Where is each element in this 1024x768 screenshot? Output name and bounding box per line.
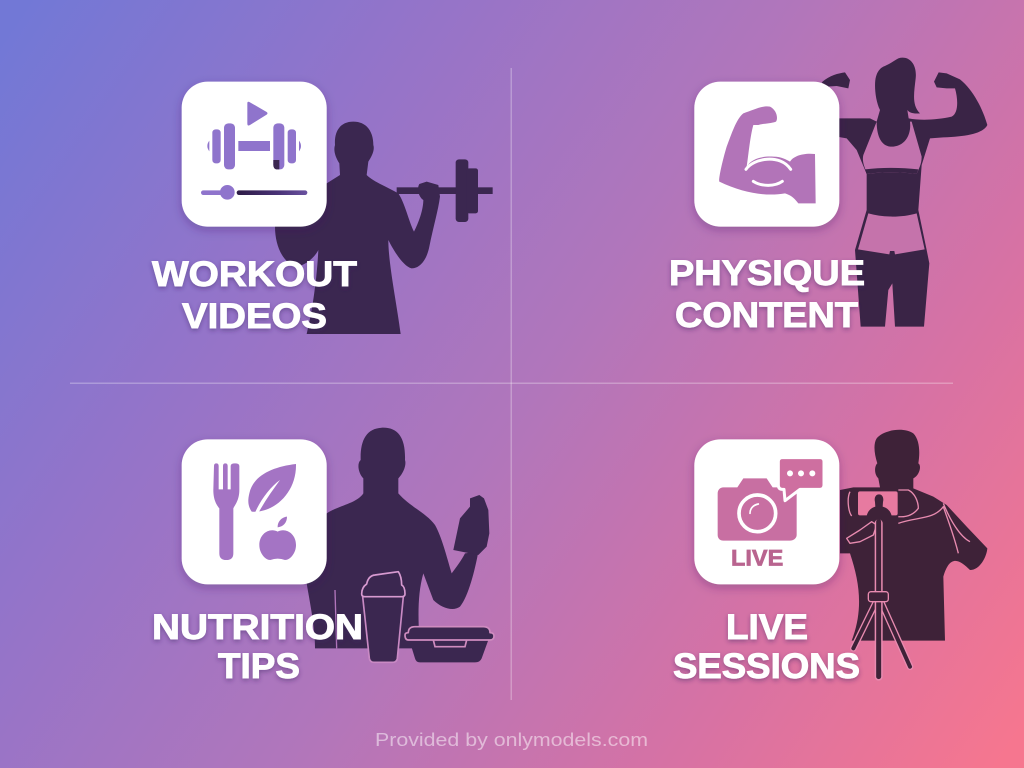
- heading: nutrition tips: [152, 608, 363, 686]
- icon card: flexed arm: [694, 82, 839, 227]
- heading: live sessions: LIVE: [726, 608, 808, 647]
- heading: workout videos: VIDEOS: [182, 297, 327, 336]
- heading: physique content: PHYSIQUE: [669, 254, 865, 293]
- silhouette: man filming on tripod: [840, 430, 987, 677]
- heading: workout videos: [152, 255, 357, 336]
- silhouette: man with bottle and meal prep: [307, 428, 494, 662]
- heading: physique content: [669, 254, 865, 335]
- heading: nutrition tips: TIPS: [218, 647, 300, 686]
- heading: workout videos: WORKOUT: [152, 255, 357, 294]
- panel: nutrition tips: [152, 428, 494, 686]
- panel: workout videos: [152, 82, 493, 336]
- heading: live sessions: [673, 608, 860, 686]
- icon card: camera with chat bubble: [694, 439, 839, 584]
- heading: live sessions: SESSIONS: [673, 647, 860, 686]
- silhouette: woman flexing: [822, 58, 987, 327]
- heading: nutrition tips: NUTRITION: [152, 608, 363, 647]
- silhouette: man with barbell: [275, 122, 493, 334]
- panel: physique content: [669, 58, 987, 335]
- footer credit: Provided by onlymodels.com: [375, 730, 648, 750]
- icon card: fork, leaf and apple: [182, 439, 327, 584]
- icon card: camera with chat bubble: LIVE: [731, 546, 783, 571]
- panel: live sessions: [673, 430, 987, 686]
- icon card: video dumbbell: [182, 82, 327, 227]
- heading: physique content: CONTENT: [675, 296, 858, 335]
